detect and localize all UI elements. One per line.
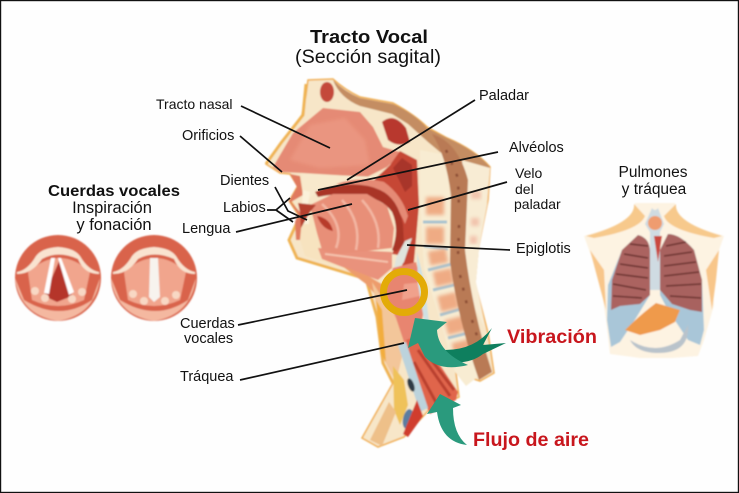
tongue [310, 194, 394, 254]
icon: torso with lungs [584, 203, 724, 358]
epiglottis [392, 238, 412, 278]
anatomy labels [156, 88, 571, 385]
mandible and floor of mouth [300, 205, 345, 269]
palate bone [302, 174, 380, 205]
heading: lungs: Pulmones [619, 164, 688, 181]
cervical vertebrae column [420, 150, 480, 386]
title [295, 26, 441, 68]
anatomy labels: Cuerdas [180, 316, 235, 332]
label: Flujo de aire: Flujo de aire [473, 429, 589, 451]
anatomy labels: Alvéolos [509, 140, 564, 156]
posterior neck [462, 160, 490, 330]
arrow: vibration tail [445, 328, 506, 362]
anatomy labels: Labios [223, 200, 266, 216]
heading: vocal cords [48, 183, 180, 234]
arrow: vibration [408, 318, 468, 367]
anatomy labels: Tráquea [180, 369, 234, 385]
lips [289, 174, 304, 240]
left lung [607, 235, 650, 347]
anatomy labels: paladar [514, 196, 561, 212]
skull brown band [333, 80, 490, 176]
spinal cord [432, 134, 492, 380]
heading: vocal cords: Inspiración [72, 199, 152, 217]
anatomy labels: del [515, 181, 534, 197]
arrow: air flow [427, 394, 467, 445]
neck front muscles [342, 266, 392, 340]
icon: open vocal cords [15, 235, 101, 321]
anatomy labels: Dientes [220, 173, 269, 189]
heading: lungs [619, 164, 688, 198]
panel: lungs and trachea [584, 164, 724, 358]
icon: closed vocal cords [111, 235, 197, 321]
head silhouette [266, 79, 494, 447]
anatomy labels: Velo [515, 165, 542, 181]
label: Vibración: Vibración [507, 326, 597, 348]
anatomy labels: Lengua [182, 221, 231, 237]
leader lines [236, 100, 510, 380]
trachea and esophagus [406, 335, 458, 414]
heading: lungs: y tráquea [622, 181, 687, 198]
floor muscles [318, 248, 392, 280]
illustration: head and neck sagittal section [266, 79, 494, 447]
trachea [645, 208, 664, 290]
teeth [302, 190, 310, 224]
larynx [384, 262, 426, 348]
anatomy labels: vocales [184, 331, 233, 347]
neck vessels [393, 366, 408, 425]
oral opening [298, 203, 316, 228]
soft palate [336, 179, 408, 224]
anatomy labels: Epiglotis [516, 241, 571, 257]
right lung [660, 234, 704, 345]
nasal cavity [273, 108, 403, 177]
heading: vocal cords: Cuerdas vocales [48, 183, 180, 200]
anatomy labels: Tracto nasal [156, 96, 233, 112]
frontal sinus [320, 82, 334, 102]
title: Tracto Vocal [310, 26, 428, 47]
diaphragm and liver [625, 303, 680, 335]
anatomy labels: Orificios [182, 128, 234, 144]
pharynx and soft palate region [370, 151, 419, 276]
title: (Sección sagital) [295, 46, 441, 68]
heading: vocal cords: y fonación [76, 216, 152, 234]
skin edge [266, 84, 393, 383]
panel: vocal cords [15, 183, 197, 321]
anatomy labels: Paladar [479, 88, 529, 104]
vocal fold ring [384, 272, 424, 312]
sphenoid sinus [382, 118, 410, 145]
